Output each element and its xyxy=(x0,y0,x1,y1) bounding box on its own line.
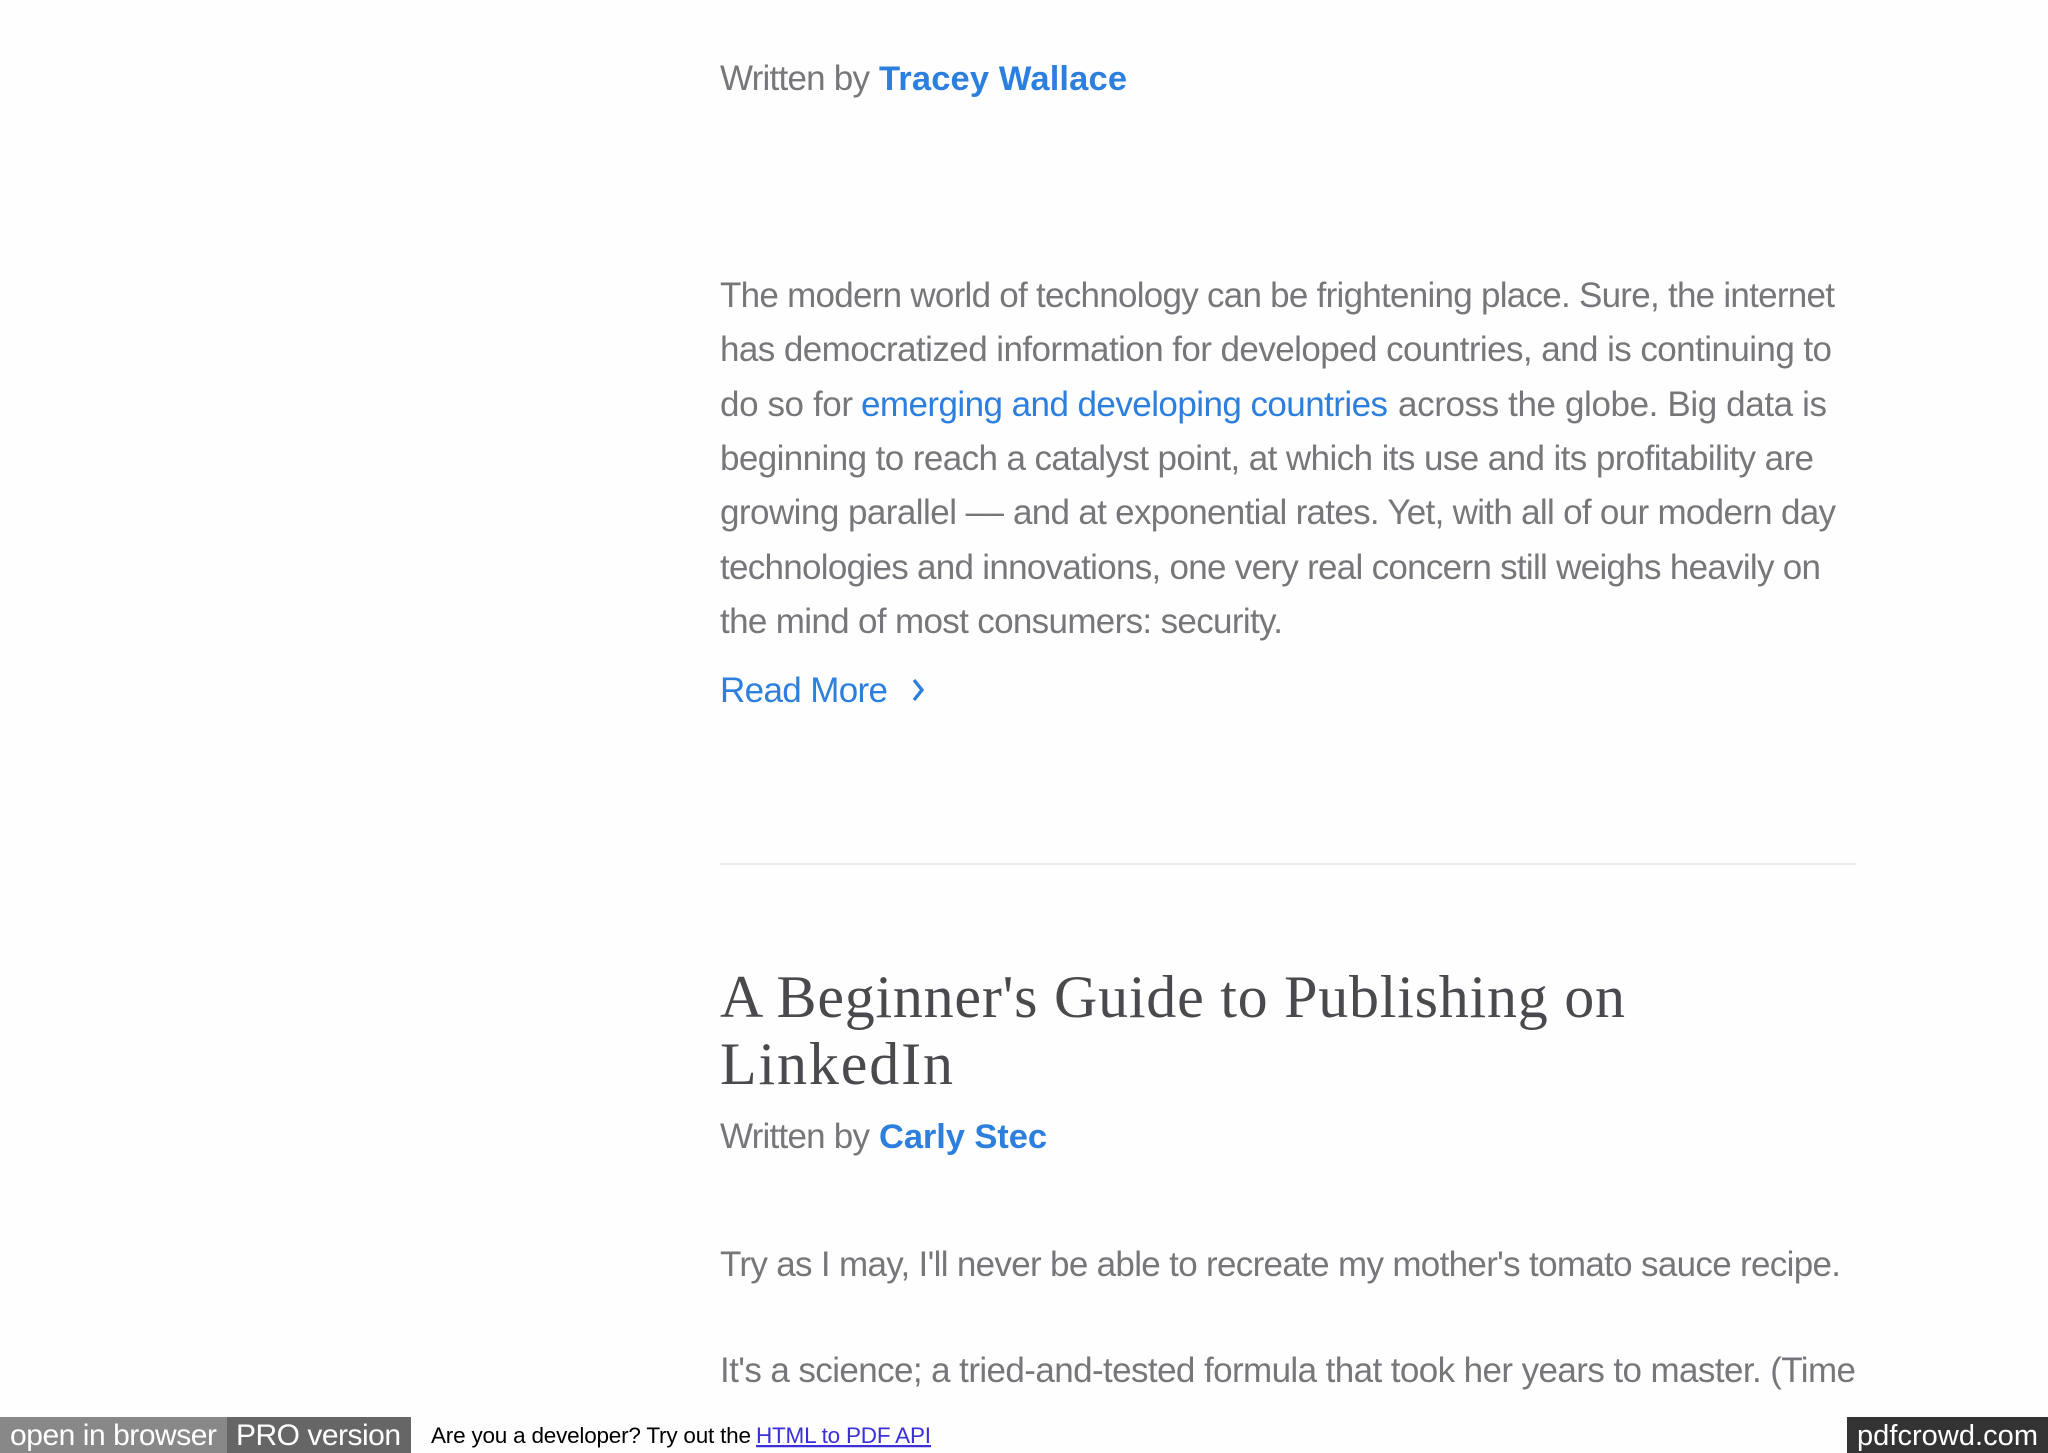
article heading: LinkedIn xyxy=(720,1031,953,1097)
article excerpt text block: beginning to reach a catalyst point, at which its use and its profitability are xyxy=(720,439,1814,478)
article excerpt text block: across the globe. Big data is xyxy=(1398,385,1827,424)
footer button: open in browser: open in browser xyxy=(10,1419,217,1452)
article excerpt text block: The modern world of technology can be frightening place. Sure, the internet xyxy=(720,276,1835,315)
article excerpt text block: do so for xyxy=(720,385,853,424)
article excerpt text block: has democratized information for developed countries, and is continuing to xyxy=(720,330,1832,369)
byline: Tracey Wallace xyxy=(720,59,1127,98)
footer promo text with API link: Are you a developer? Try out the xyxy=(431,1423,751,1448)
article excerpt text block: and at exponential rates. Yet, with all of our modern day xyxy=(1013,493,1836,532)
footer button: PRO version: PRO version xyxy=(236,1419,401,1452)
byline: Carly Stec xyxy=(720,1117,1047,1156)
article heading xyxy=(720,964,1625,1097)
footer brand: pdfcrowd.com: pdfcrowd.com xyxy=(1857,1420,2038,1452)
read more link with chevron: Read More xyxy=(720,671,888,710)
byline: Carly Stec: Carly Stec xyxy=(879,1118,1047,1156)
second article text: It's a science; a tried-and-tested formula that took her years to master. (Time xyxy=(720,1351,1856,1390)
article excerpt text block: growing parallel –– xyxy=(720,493,1005,532)
byline: Tracey Wallace: Written by xyxy=(720,59,870,98)
article excerpt text block: technologies and innovations, one very real concern still weighs heavily on xyxy=(720,548,1821,587)
footer promo text with API link: HTML to PDF API xyxy=(756,1423,931,1448)
byline: Carly Stec: Written by xyxy=(720,1117,870,1156)
second article text xyxy=(720,1245,1856,1390)
article excerpt text block: emerging and developing countries xyxy=(861,385,1388,424)
footer promo text with API link xyxy=(431,1423,931,1448)
divider xyxy=(720,863,1856,865)
article excerpt text block: the mind of most consumers: security. xyxy=(720,602,1283,641)
byline: Tracey Wallace: Tracey Wallace xyxy=(879,60,1127,98)
second article text: Try as I may, I'll never be able to recreate my mother's tomato sauce recipe. xyxy=(720,1245,1841,1284)
article excerpt text block xyxy=(720,276,1836,641)
article heading: A Beginner's Guide to Publishing on xyxy=(720,964,1625,1030)
